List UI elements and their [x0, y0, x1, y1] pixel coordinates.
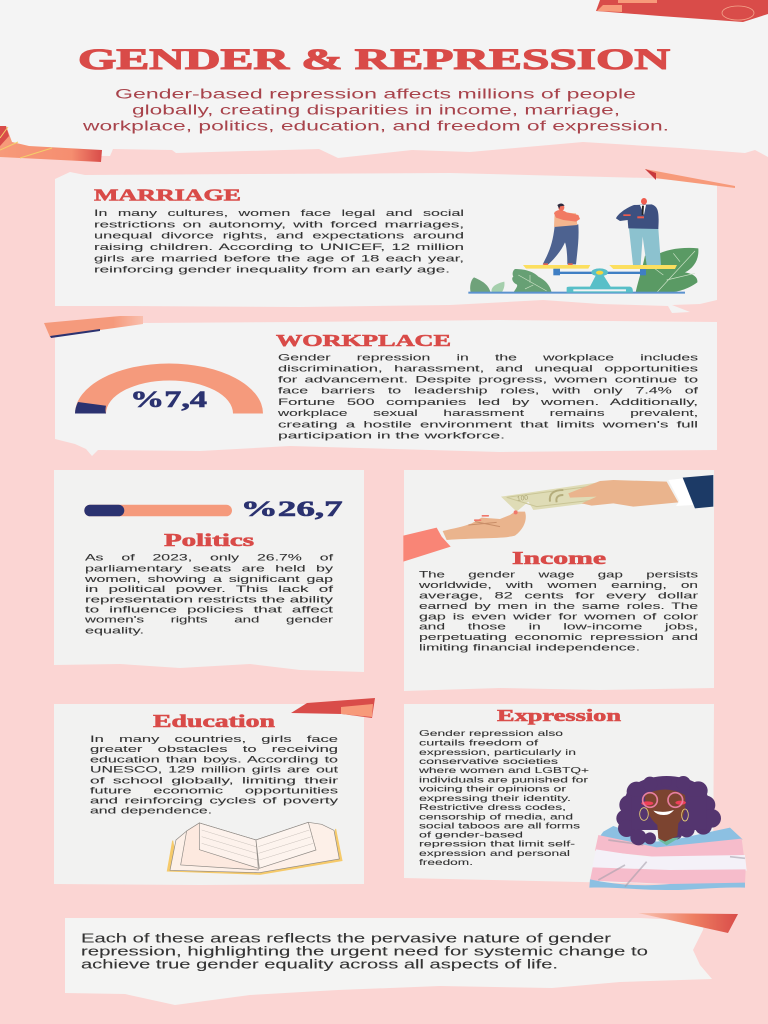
workplace text: face barriers to leadership roles, with only 7.4% of — [278, 385, 699, 396]
conclusion text — [81, 932, 648, 971]
heading: workplace: WORKPLACE — [276, 331, 451, 350]
politics text: representation restricts the ability — [85, 593, 334, 604]
politics text: women's rights and gender — [83, 614, 333, 625]
panel: marriage — [55, 169, 735, 313]
expression text: Restrictive dress codes, — [419, 803, 566, 812]
income text: gap is even wider for women of color — [419, 610, 698, 621]
marriage text: In many cultures, women face legal and social — [94, 207, 464, 218]
marriage text: girls are married before the age of 18 each year, — [94, 252, 464, 263]
heading: income: Income — [512, 548, 606, 568]
tape — [645, 169, 735, 188]
expression text: where women and LGBTQ+ — [417, 766, 589, 775]
income text: The gender wage gap persists — [419, 568, 698, 579]
marriage text — [94, 207, 464, 275]
illustration: hands exchanging money: 100 — [517, 494, 529, 503]
education text — [90, 733, 339, 816]
workplace text: Fortune 500 companies led by women. Additionally, — [278, 396, 698, 407]
conclusion text: repression, highlighting the urgent need for systemic change to — [81, 945, 648, 959]
tape — [638, 913, 738, 933]
workplace text: participation in the workforce. — [278, 429, 505, 440]
heading: education: Education — [153, 711, 275, 731]
header band — [0, 0, 768, 158]
expression text: of gender-based — [419, 831, 524, 840]
expression text: censorship of media, and — [419, 812, 574, 821]
politics text: As of 2023, only 26.7% of — [85, 552, 334, 563]
politics text: to influence policies that affect — [85, 604, 334, 615]
income text: worldwide, with women earning, on — [417, 579, 698, 590]
subtitle — [81, 87, 669, 134]
education text: of school globally, limiting their — [90, 774, 338, 785]
workplace text: discrimination, harassment, and unequal opportunities — [278, 362, 699, 373]
politics text: equality. — [85, 624, 144, 635]
expression text: repression that limit self- — [419, 840, 575, 849]
marriage text: reinforcing gender inequality from an early age. — [94, 264, 450, 275]
conclusion text: Each of these areas reflects the pervasive nature of gender — [81, 932, 611, 946]
income text: earned by men in the same roles. The — [419, 600, 698, 611]
income text: average, 82 cents for every dollar — [419, 589, 698, 600]
politics text: in political power. This lack of — [85, 583, 334, 594]
workplace text: creating a hostile environment that limits women's full — [278, 418, 698, 429]
illustration: hands exchanging money — [403, 475, 713, 562]
illustration: woman wrapped in transgender flag — [589, 776, 747, 890]
title: GENDER & REPRESSION — [78, 43, 671, 76]
expression text: freedom. — [419, 858, 473, 867]
decorative tape: top right — [596, 0, 768, 22]
tape — [44, 316, 143, 338]
education text: In many countries, girls face — [90, 733, 338, 744]
income text: limiting financial independence. — [419, 641, 640, 652]
politics text: parliamentary seats are held by — [85, 563, 334, 574]
expression text: social taboos are all forms — [419, 821, 580, 830]
expression text: expression and personal — [419, 849, 570, 858]
workplace text: for advancement. Despite progress, women continue to — [278, 373, 698, 384]
income text — [417, 568, 698, 652]
expression text: expression, particularly in — [419, 748, 577, 757]
gauge chart: 7.4% — [75, 363, 263, 414]
education text: education than boys. According to — [90, 754, 338, 765]
education text: UNESCO, 129 million girls are out — [90, 764, 339, 775]
expression text — [417, 729, 589, 867]
expression text: curtails freedom of — [419, 738, 539, 747]
panel: education — [54, 698, 375, 885]
panel: expression — [404, 704, 747, 890]
marriage text: raising children. According to UNICEF, 12 million — [94, 241, 464, 252]
politics text — [83, 552, 334, 635]
illustration: man and woman on a scale — [468, 198, 698, 294]
marriage text: unequal divorce rights, and expectations around — [94, 230, 464, 241]
subtitle: globally, creating disparities in income, marriage, — [132, 103, 620, 118]
marriage text: restrictions on autonomy, with forced marriages, — [94, 218, 464, 229]
panel: income — [403, 470, 714, 691]
politics text: women, showing a significant gap — [83, 573, 333, 584]
heading: expression: Expression — [497, 706, 622, 725]
subtitle: workplace, politics, education, and freedom of expression. — [81, 119, 669, 134]
conclusion text: achieve true gender equality across all aspects of life. — [81, 957, 558, 971]
icon: open book — [167, 822, 342, 874]
expression text: Gender repression also — [419, 729, 564, 738]
income text: and those in low-income jobs, — [419, 620, 698, 631]
panel: politics — [54, 470, 364, 672]
subtitle: Gender-based repression affects millions of people — [115, 87, 636, 102]
education text: and dependence. — [90, 805, 212, 816]
decorative tape: left — [0, 126, 102, 162]
panel: conclusion — [65, 913, 738, 1005]
heading: politics: Politics — [164, 530, 254, 550]
expression text: expressing their identity. — [419, 794, 571, 803]
education text: and reinforcing cycles of poverty — [90, 795, 339, 806]
expression text: individuals are punished for — [419, 776, 588, 785]
education text: greater obstacles to receiving — [90, 743, 338, 754]
workplace text: Gender repression in the workplace includes — [278, 351, 699, 362]
panel: workplace — [44, 316, 717, 456]
income text: perpetuating economic repression and — [419, 631, 698, 642]
expression text: voicing their opinions or — [419, 785, 566, 794]
heading: marriage: MARRIAGE — [94, 186, 241, 204]
expression text: conservative societies — [419, 757, 558, 766]
education text: future economic opportunities — [90, 784, 339, 795]
bar value: %26,7 — [241, 496, 343, 521]
workplace text: workplace sexual harassment remains prevalent, — [276, 407, 698, 418]
gauge value: %7,4 — [130, 387, 208, 412]
progress bar: 26.7% — [84, 496, 343, 521]
workplace text — [276, 351, 699, 440]
tape — [291, 698, 375, 718]
